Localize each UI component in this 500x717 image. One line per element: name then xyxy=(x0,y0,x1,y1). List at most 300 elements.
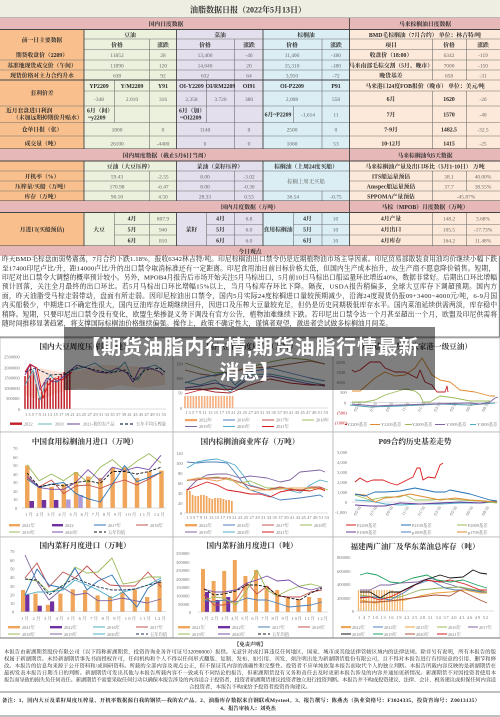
palm oil values: 11,400 xyxy=(285,53,300,59)
row labels: 期货收盘价（2209） xyxy=(16,51,68,59)
panel: weekly data table: 59.43 xyxy=(111,174,123,180)
chart: rapeseed oil total stock: 800000 xyxy=(337,555,351,560)
panel: weekly data table: 库存（万吨） xyxy=(25,192,59,200)
legend xyxy=(10,420,167,428)
legend: 2017年 xyxy=(272,624,286,631)
soybean oil values: YP2209 xyxy=(89,84,109,90)
chart: palm oil monthly imports: 50 xyxy=(13,463,18,468)
commentary text: 内买船极少，中期进口不确定性很大，国内豆油库存近期继续回升，因进口及压榨大豆量较充足，但仍是历史同期极低库存水平。国内菜油延续供需两淡，库存稳中 xyxy=(2,300,497,310)
legend xyxy=(9,522,164,536)
chart: rapeseed oil monthly imports xyxy=(173,537,333,638)
date axis labels: 05/16 xyxy=(353,504,362,516)
commentary text: 预计回落，关注全月最终的出口环比。若5月马棕出口环比增幅15%以上，当月马棕库存环比下降。隔夜，USDA报告稍偏多，全球大豆库存下调超预期。国内方 xyxy=(2,282,497,292)
commentary text: 随时间推移显著趋紧，将支撑国际棕榈油价格继续偏强。操作上，政策不确定性大，谨慎者观望，激进者尝试做多棕榈油月间差。 xyxy=(2,318,392,328)
date axis labels: 08/16 xyxy=(481,400,490,412)
panel: weekly data table: 28.33 xyxy=(199,194,211,200)
section headers: 棕榈油 xyxy=(297,31,315,39)
panel: weekly data table: 8.00 xyxy=(200,184,210,190)
palm oil values: -180 xyxy=(331,53,341,59)
chart: palm oil monthly imports: 40 xyxy=(13,472,18,477)
chart: palm oil monthly imports: 70 xyxy=(13,446,18,451)
legend: 2017年 xyxy=(479,624,493,631)
legend: 2019年 xyxy=(64,631,78,638)
chart: rapeseed oil monthly imports: 100000 xyxy=(176,594,190,598)
panel: weekly data table: -0.75 xyxy=(330,194,342,200)
legend: 五年均值 xyxy=(108,529,126,536)
legend: Y1809基差 xyxy=(477,421,498,427)
Malaysian palm oil values: 晚货基差 xyxy=(379,72,403,80)
chart: palm oil commercial stock: 20 xyxy=(178,501,183,506)
section headers: 价格 xyxy=(443,41,455,49)
legend: P2009基差 xyxy=(468,522,488,528)
overlay banner headline: 【期货油脂内行情,期货油脂行情最新 xyxy=(80,335,418,359)
chart: palm oil commercial stock: 40 xyxy=(178,491,183,496)
panel: monthly data table: 6月 xyxy=(216,236,225,244)
palm oil values: -180 xyxy=(331,64,341,70)
chart: rapeseed oil total stock: 0 xyxy=(352,609,355,614)
rapeseed oil values: OI-Y2209 xyxy=(179,84,204,90)
date axis labels: 07/16 xyxy=(369,400,378,412)
panel: weekly data table: 豆油（大豆压榨） xyxy=(107,162,153,170)
legend: Y1909基差 xyxy=(446,421,467,427)
panel: weekly data table: 4.50 xyxy=(158,194,168,200)
disclaimer text: 权属于新湖期货。未经新湖期货事先书面授权许可，任何机构和个人不得以任何形式翻版、复制、发布、如引用、刊发，须注明出处为新湖期货股份有限公司，且不得对本报告进行有悖原意的引用、删节和修 xyxy=(4,654,497,662)
chart: P09 contract basis: 4,000 xyxy=(337,460,348,466)
row labels: 套利价差 xyxy=(30,89,54,97)
panel: monthly data table: 105.5 xyxy=(443,228,455,234)
row labels: 成交量（吨） xyxy=(25,140,59,148)
disclaimer text: 改。本报告的信息均来源于公开资料和/或调研资料。所载的全部内容及观点公正，但不保证其内容的准确性和完整性。投资者不应单纯依靠本报告而取代个人的独立判断。本报告所载内容反映的是新湖期货在 xyxy=(4,662,497,670)
section headers: 涨跌 xyxy=(157,41,169,49)
chart: soybean weekly crush: 国内大豆周度压榨量（吨） xyxy=(39,341,131,351)
soybean oil values: 28 xyxy=(160,53,166,59)
panel: weekly data table: 菜油（菜籽压榨） xyxy=(197,162,243,170)
palm oil values xyxy=(265,53,341,148)
panel: monthly data table: 11.48% xyxy=(475,238,492,244)
panel: weekly data table: ITS船运量预估 xyxy=(372,172,410,180)
section headers: 豆油 xyxy=(124,31,136,39)
section headers: BMD毛棕榈油（7月合约） 单位：林吉特/吨 xyxy=(369,31,481,39)
chart: P09 contract basis: 2,000 xyxy=(337,480,348,486)
panel: weekly data table: 压榨量/买船（万吨） xyxy=(15,182,69,190)
row labels xyxy=(6,36,83,148)
Malaysian palm oil values: -150 xyxy=(478,64,488,70)
panel: weekly data table: -6.47 xyxy=(157,184,169,190)
panel: monthly data table: 4月产量 xyxy=(381,214,401,222)
chart: palm oil commercial stock: 0 xyxy=(180,511,183,516)
panel: monthly data table: 4月 xyxy=(216,214,225,222)
panel: monthly data table: 4月 xyxy=(303,214,312,222)
disclaimer text: 报告而导致的损失负任何责任。新湖期货不需要采取任何行动以确保本报告涉及的内容适合于投资者，投资者新湖期货建议投资者独立进行投资判断。本报告并不构成投资建议、法律、会计、税务建议或担保任何内容适 xyxy=(4,676,497,684)
date axis labels: 06/16 xyxy=(465,400,474,412)
chart: soybean oil weekly stock: 国内豆油周度库存（万吨） xyxy=(206,341,298,351)
chart: rapeseed oil monthly imports: 200000 xyxy=(176,577,190,582)
date axis labels: 03/16 xyxy=(433,504,442,516)
legend: 2021年 xyxy=(276,423,290,430)
chart: soybean oil weekly stock: 50 xyxy=(178,390,183,396)
panel: weekly data table: 36.54 xyxy=(287,194,299,200)
date axis labels: 05/16 xyxy=(353,400,362,412)
title banner: 油脂数据日报（2022年5月13日） xyxy=(190,4,306,14)
legend: 2019年 xyxy=(22,529,36,536)
chart: P09 contract basis: 1,000 xyxy=(337,490,348,496)
legend: 2018年 xyxy=(352,631,366,638)
legend: 2020年 xyxy=(232,631,246,638)
chart: palm oil monthly imports: 20 xyxy=(13,489,18,494)
panel: daily data table xyxy=(0,18,500,149)
date axis labels: 07/16 xyxy=(369,504,378,516)
chart: soybean oil basis: 500 xyxy=(340,390,348,395)
Malaysian palm oil values: 马来南部毛棕交割（5月、晚市） xyxy=(349,62,433,70)
soybean oil values: 26100 xyxy=(110,142,124,148)
chart: rapeseed oil total stock: 400000 xyxy=(337,582,351,587)
date axis labels: 01/16 xyxy=(417,400,426,412)
rapeseed oil values: 2,358 xyxy=(185,97,198,103)
panel: monthly data table: 6月 xyxy=(303,236,312,244)
legend: 2019年 xyxy=(199,529,213,536)
soybean oil values: 120 xyxy=(159,64,167,70)
panel: weekly data table: SPPOMA产量预估 xyxy=(367,192,415,200)
chart: rapeseed oil total stock: 600000 xyxy=(337,569,351,574)
Malaysian palm oil values: -119 xyxy=(478,53,488,59)
legend: 2021年 xyxy=(192,624,206,631)
footnotes xyxy=(0,696,500,716)
panel: monthly data table: 10 xyxy=(333,238,338,244)
chart: soybean weekly crush: 500000 xyxy=(6,396,20,401)
legend: 2014年 xyxy=(384,624,398,631)
chart: soybean oil weekly stock: 0 xyxy=(180,406,183,411)
panel: weekly data table: -3.02 xyxy=(243,174,255,180)
disclaimer heading: 【免责声明】 xyxy=(234,640,266,648)
legend: 2016年 xyxy=(237,416,251,424)
chart: soybean oil basis: 1500 xyxy=(336,370,346,375)
date axis labels xyxy=(353,400,490,412)
date axis labels: 08/16 xyxy=(481,504,490,516)
panel: monthly data table: 6.8 xyxy=(246,216,253,222)
panel: weekly data table: -0.30 xyxy=(243,184,255,190)
date axis labels: 11/16 xyxy=(401,401,410,412)
Malaysian palm oil values: 收盘价（18:00） xyxy=(370,51,412,59)
panel: monthly data table: 菜籽 xyxy=(186,226,197,234)
row labels: 现货价格对主力合约升水 xyxy=(10,72,74,80)
section headers: 涨跌 xyxy=(243,41,255,49)
rapeseed oil values: 20 xyxy=(246,64,252,70)
panel: weekly data table: 棕榈油（上周24度买船） xyxy=(274,162,338,170)
soybean oil values: 92 xyxy=(160,74,166,80)
legend: 2022年 xyxy=(199,522,213,529)
rapeseed oil values: OI/RM2209 xyxy=(206,84,235,90)
legend: 2022年 xyxy=(232,624,246,631)
panel: monthly data table: -17.73% xyxy=(474,228,493,234)
rapeseed oil values: 13,400 xyxy=(198,53,213,59)
chart: rapeseed oil monthly imports: 0 xyxy=(189,610,192,615)
chart: rapeseed oil monthly imports: 250000 xyxy=(176,568,190,573)
date axis labels: 09/16 xyxy=(385,504,394,516)
chart: rapeseed monthly imports: 20 xyxy=(10,592,15,598)
palm oil values: 15,310 xyxy=(285,64,300,70)
palm oil values: OI-P2209 xyxy=(280,84,304,90)
soybean oil values: 11852 xyxy=(110,53,124,59)
legend: 2017年 xyxy=(150,624,164,631)
bars xyxy=(21,582,162,612)
chart: P09 contract basis xyxy=(333,432,500,537)
legend: 2022年 xyxy=(199,416,213,424)
Malaysian palm oil values: 马来港口24度FOB报价（晚市） 单位：美元/吨 xyxy=(365,82,485,90)
panel: monthly data table: 月进口(买船预估) xyxy=(20,226,64,234)
chart: palm oil monthly imports: 中国食用棕榈油月进口（万吨） xyxy=(32,436,138,446)
legend: 2022 xyxy=(65,523,74,528)
palm oil values: -1,614 xyxy=(301,112,315,118)
chart: rapeseed monthly imports: 1月 2月 3月 4月 5月 6月 7月 8月 9月 10月 11月 12月 xyxy=(21,615,166,622)
chart: palm oil commercial stock: 国内棕榈油商业库存（万吨） xyxy=(201,436,299,446)
commentary text: 稍降。短期，只要印尼出口禁令没有变化，欧盟生柴掺混义务下调没有官方公告，植物油难继续下跌。若印尼出口禁令达一个月甚至超出一个月，欧盟及印尼供需将 xyxy=(2,309,497,319)
panel: monthly data table: 10 xyxy=(333,216,338,222)
panel: monthly data table: 大豆 xyxy=(93,226,105,234)
panel: monthly data table: 6.0 xyxy=(246,228,253,234)
chart: soybean weekly crush: 1000000 xyxy=(4,386,20,391)
chart: rapeseed oil monthly imports: 1月 2月 3月 4月 5月 6月 7月 8月 9月 10月 11月 12月 xyxy=(201,615,328,622)
Malaysian palm oil values: 1620 xyxy=(443,97,455,103)
palm oil values: 2,008 xyxy=(286,97,298,103)
chart: rapeseed monthly imports: 50 xyxy=(10,566,15,572)
legend: 2020 xyxy=(55,422,64,426)
chart: palm oil monthly imports: 1月 2月 3月 4月 5月 6月 7月 8月 9月 10月 11月 12月 xyxy=(25,511,165,518)
soybean oil values: 6月（间） xyxy=(87,106,113,114)
palm oil values: 2500 xyxy=(287,128,298,134)
panel: weekly data table: 马来棕榈油旬5天数据 xyxy=(397,152,453,160)
legend: Y2209基差 xyxy=(347,421,368,427)
legend xyxy=(345,421,498,427)
chart: rapeseed monthly imports: 60 xyxy=(10,558,15,563)
legend: 2020年 xyxy=(416,631,430,638)
legend xyxy=(185,416,330,430)
chart: soybean oil basis: 0 xyxy=(344,400,347,406)
chart: rapeseed oil monthly imports: 50000 xyxy=(178,602,190,607)
legend xyxy=(178,624,326,638)
bars xyxy=(25,466,164,508)
soybean oil values: 638 xyxy=(113,74,121,80)
chart: soybean oil basis: 豆油基差走势（张家港一级豆油） xyxy=(358,341,472,351)
palm oil values: -72 xyxy=(332,74,340,80)
panel: monthly data table: 164.2 xyxy=(443,238,455,244)
legend xyxy=(341,624,493,638)
chart: soybean oil weekly stock: 200 xyxy=(176,347,184,352)
chart: rapeseed oil monthly imports: 300000 xyxy=(176,560,190,565)
panel: weekly data table xyxy=(0,149,500,201)
chart: rapeseed oil monthly imports: 国内菜籽油月度进口（吨） xyxy=(206,540,298,550)
legend: 2019年 xyxy=(384,631,398,638)
chart: rapeseed oil monthly imports: 150000 xyxy=(176,585,190,590)
legend: 2018年 xyxy=(316,416,330,424)
panel: weekly data table: 90.10 xyxy=(111,194,123,200)
rapeseed oil values: 64 xyxy=(246,74,252,80)
panel: monthly data table: 4月出口 xyxy=(381,226,401,234)
chart: palm oil monthly imports: 10 xyxy=(13,497,18,502)
Malaysian palm oil values: 6月 xyxy=(387,95,395,103)
Malaysian palm oil values: 10-12月 xyxy=(381,140,401,148)
panel: weekly data table: 38.55% xyxy=(475,184,492,190)
panel: monthly data table: 807.9 xyxy=(157,216,169,222)
panel: monthly data table: 810 xyxy=(159,238,167,244)
row labels: 前一日主要数据 xyxy=(22,36,62,44)
chart: soybean weekly crush: 2500000 xyxy=(4,354,20,360)
rapeseed oil values: 6月（加） xyxy=(179,106,205,114)
chart: P09 contract basis: 5,000 xyxy=(337,450,348,456)
legend: P1909基差 xyxy=(357,529,377,535)
chart: P09 contract basis: P09合约历史基差走势 xyxy=(379,436,452,446)
soybean oil values: 0 xyxy=(162,128,165,134)
chart: palm oil monthly imports: 0 xyxy=(15,506,18,511)
panel: weekly data table: 8.00 xyxy=(200,174,210,180)
legend: 2020年 xyxy=(237,423,251,430)
chart: soybean weekly crush: 1 3 5 7 9 11 13 15 17 19 21 23 25 27 29 31 33 35 37 39 41 43 45 47 49 51 53 xyxy=(25,412,167,417)
panel: weekly data table: 40.00% xyxy=(475,174,492,180)
section headers: 菜油 xyxy=(214,31,226,39)
panel: weekly data table: 38.1 xyxy=(444,174,454,180)
legend: 2022年 xyxy=(352,624,366,631)
Malaysian palm oil values: 1415 xyxy=(443,142,455,148)
panel: monthly data table: 5月 xyxy=(128,226,136,234)
panel: monthly data table: 4月 xyxy=(128,214,136,222)
chart: P09 contract basis: 3,000 xyxy=(337,470,348,476)
legend: 2021-我的农产品 xyxy=(83,420,115,428)
chart: palm oil commercial stock: 120 xyxy=(176,451,184,456)
panel: weekly data table: -45.87% xyxy=(457,194,476,200)
chart: soybean oil weekly stock: 100 xyxy=(176,376,184,381)
soybean oil values: 1800 xyxy=(112,128,123,134)
footnotes: 备注：1、国内大豆及菜籽周度压榨量、开机率数据源自我的钢铁—我的农产品。2、油脂库存数据来自钢联或Mysteel。3、报告撰写：陈燕杰（执业资格号：F3024335，投资咨询号：Z0013135） xyxy=(2,696,480,705)
panel: monthly data table: 4月库存 xyxy=(381,236,401,244)
chart: soybean oil basis: (1000) xyxy=(335,420,347,426)
legend: 2019年 xyxy=(192,631,206,638)
footnotes: 4、报告审核人：刘英杰 xyxy=(220,704,277,712)
panel: monthly data table xyxy=(0,201,500,246)
chart: rapeseed monthly imports: 30 xyxy=(10,584,15,589)
panel: today's view xyxy=(0,246,500,337)
commentary text: 至17400印尼卢比/升，距14000卢比/升的出口禁令取消标准还有一定距离。印尼食用油目前目标价格太低，但国内生产成本抬升，故生产商不愿意降价销售。短期， xyxy=(2,263,495,273)
panel: monthly data table: 食用棕榈油 xyxy=(264,226,293,234)
panel: disclaimer xyxy=(0,638,500,692)
chart: soybean weekly crush: 2000000 xyxy=(4,366,20,370)
soybean oil values: Y/M2209 xyxy=(121,84,144,90)
legend: p1809基差 xyxy=(412,529,432,535)
chart: rapeseed monthly imports: 10 xyxy=(10,601,15,606)
soybean oil values: 11890 xyxy=(110,64,124,70)
chart: palm oil commercial stock: 1 3 5 7 9 11 13 15 17 19 21 23 25 27 29 31 33 35 37 39 41 43 45 47 49 51 53 xyxy=(186,515,330,520)
legend: 2018年 xyxy=(314,522,328,529)
rapeseed oil values: ~OI2209 xyxy=(180,116,201,122)
soybean oil values: Y91 xyxy=(158,84,168,90)
chart: soybean weekly crush xyxy=(0,338,173,432)
legend: 2017年 xyxy=(276,522,290,529)
soybean oil values xyxy=(87,53,170,148)
palm oil values: 53 xyxy=(333,142,339,148)
soybean oil values: 2.010 xyxy=(126,97,138,103)
chart: palm oil commercial stock: 80 xyxy=(178,471,183,476)
legend: 2021年 xyxy=(22,522,36,529)
section headers: 价格 xyxy=(286,41,298,49)
Malaysian palm oil values: -25 xyxy=(479,142,487,148)
disclaimer text: 最初发表本报告日期当日的判断。新湖期货可发出其他与本报告所载内容不一致或有不同结论的报告，但新湖期货没有义务和责任去及时更新本报告涉及的内容并通知更新情况。新湖期货不对因投资者使用本 xyxy=(4,668,497,676)
palm oil values: 6月~P2209 xyxy=(265,110,292,118)
overlay banner headline xyxy=(64,327,435,390)
panel: weekly data table: 棕榈上周无买船 xyxy=(287,178,325,186)
legend: P2109基差 xyxy=(412,522,432,528)
chart: soybean oil basis: 1000 xyxy=(336,380,346,385)
bars xyxy=(201,560,322,612)
row labels: 基准地现货成交价（午间） xyxy=(7,62,77,70)
Malaysian palm oil values: -20 xyxy=(479,97,487,103)
chart: soybean oil weekly stock: 150 xyxy=(176,362,184,366)
section headers: 价格 xyxy=(111,41,123,49)
section headers xyxy=(111,20,489,49)
chart: soybean oil basis: (500) xyxy=(337,410,347,416)
date axis labels: 09/16 xyxy=(385,400,394,412)
legend: 2018年 xyxy=(22,631,36,638)
Malaysian palm oil values: -40 xyxy=(479,112,487,118)
soybean oil values: -4400 xyxy=(157,142,170,148)
panel: weekly data table: 0.53 xyxy=(244,194,254,200)
legend: Y2109基差 xyxy=(381,421,402,427)
palm oil values: 558 xyxy=(332,97,340,103)
legend: 2021年 xyxy=(276,529,290,536)
palm oil values: 3,910 xyxy=(286,74,298,80)
legend: 2017年 xyxy=(108,522,122,529)
row labels: 仓单日报（张） xyxy=(22,126,62,134)
chart: rapeseed oil total stock xyxy=(333,537,500,638)
section headers: 项目 xyxy=(385,41,397,49)
Malaysian palm oil values: 7月 xyxy=(387,110,395,118)
title banner xyxy=(0,0,500,18)
section headers: 马来棕榈油日度数据 xyxy=(399,20,451,28)
legend: p1709基差 xyxy=(468,529,488,535)
panel: weekly data table: 国内周度数据（截止5月6日当周） xyxy=(123,152,209,160)
chart: rapeseed monthly imports: 70 xyxy=(10,549,15,554)
Malaysian palm oil values: 7-9月 xyxy=(384,126,398,134)
disclaimer text: 合投资者，本报告不构成给予投资者投资咨询建议。 xyxy=(189,682,311,690)
chart: palm oil commercial stock: 60 xyxy=(178,481,183,486)
legend: 2016年 xyxy=(448,624,462,631)
legend xyxy=(8,624,168,638)
panel: today's view: 今日观点 xyxy=(238,248,263,256)
date axis labels: 03/16 xyxy=(433,400,442,412)
row labels: 近月套盘进口利润 xyxy=(6,106,53,114)
chart: P09 contract basis: -1,000 xyxy=(335,510,347,516)
legend: 2019年 xyxy=(199,423,213,430)
legend: 五年均值 xyxy=(272,631,290,638)
soybean oil values: 316 xyxy=(159,97,167,103)
overlay banner headline: 消息】 xyxy=(220,360,280,384)
section headers: 价格 xyxy=(199,41,211,49)
rapeseed oil values: 0 xyxy=(248,128,251,134)
panel: monthly data table: 148.2 xyxy=(443,216,455,222)
legend: 2015年 xyxy=(416,624,430,631)
panel: weekly data table: 170.98 xyxy=(110,184,125,190)
legend xyxy=(185,522,328,536)
rapeseed oil values: 3.720 xyxy=(214,97,227,103)
chart: soybean oil weekly stock xyxy=(173,338,333,432)
soybean oil values: -348 xyxy=(94,97,104,103)
disclaimer text xyxy=(4,648,497,690)
section headers: 涨跌 xyxy=(330,41,342,49)
rapeseed oil values: 380 xyxy=(245,97,253,103)
Malaysian palm oil values: 6342 xyxy=(444,53,455,59)
Malaysian palm oil values: -31 xyxy=(479,74,487,80)
legend: P2209基差 xyxy=(357,522,377,528)
legend: 2016年 xyxy=(237,522,251,529)
legend: Y2009基差 xyxy=(412,421,433,427)
commentary text xyxy=(2,254,497,328)
